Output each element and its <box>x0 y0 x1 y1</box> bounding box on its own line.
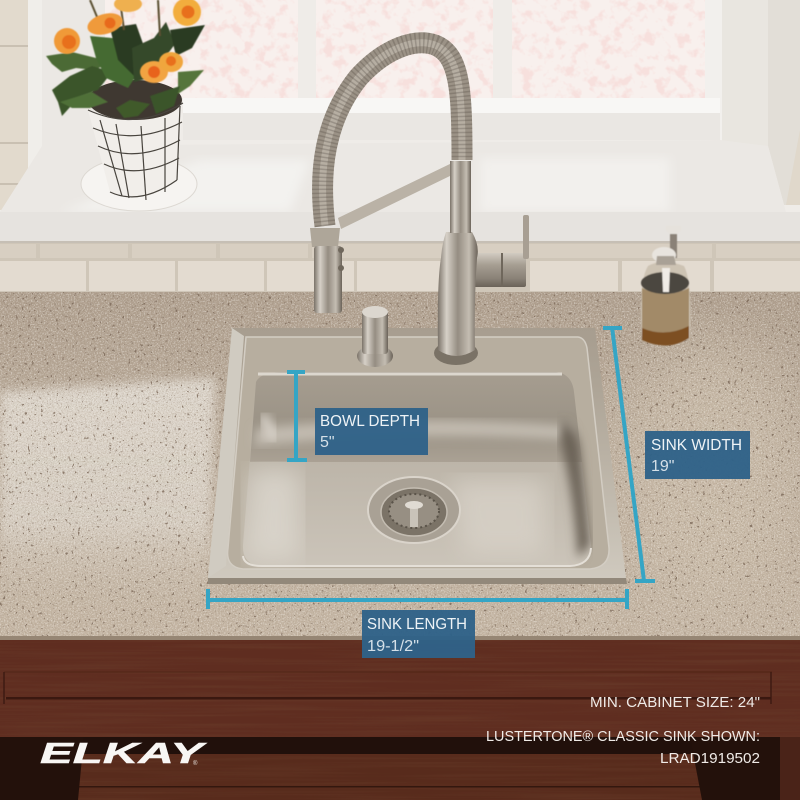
left tile wall <box>0 0 42 210</box>
faucet <box>310 43 529 365</box>
foliage <box>46 0 205 118</box>
flowers <box>54 0 201 83</box>
soap dispenser <box>357 306 393 367</box>
callout: bowl depth: 5" <box>320 434 335 451</box>
faucet base ring <box>434 341 478 365</box>
window pane: left <box>105 0 298 98</box>
sink deck rim <box>228 337 609 569</box>
soap bottle <box>641 226 690 346</box>
potted plant <box>46 0 205 211</box>
back wall <box>250 372 582 462</box>
logo: Elkay <box>40 738 207 770</box>
dimension: bowl depth <box>287 371 307 461</box>
callout: sink length <box>362 610 475 658</box>
pull-down coil hose <box>323 43 462 226</box>
callout: sink length: 19-1/2" <box>367 638 419 655</box>
logo: Elkay: ® <box>193 760 198 767</box>
callout: sink length: SINK LENGTH <box>367 616 467 633</box>
window pane: right <box>512 0 705 98</box>
callout: bowl depth: BOWL DEPTH <box>320 413 420 430</box>
pot <box>88 103 183 197</box>
text: model shown <box>486 728 760 767</box>
logo: Elkay: ELKAY <box>40 738 207 770</box>
spray head <box>310 228 344 313</box>
text: model shown: LRAD1919502 <box>660 750 760 767</box>
wire grid <box>88 103 183 200</box>
sink deck <box>208 328 626 578</box>
window sill <box>0 140 800 243</box>
granite countertop <box>0 292 800 640</box>
dimension: sink width <box>603 327 655 581</box>
faucet handle <box>466 215 529 287</box>
right window trim <box>700 0 800 205</box>
callout: sink width: 19" <box>651 458 674 475</box>
faucet body <box>438 232 478 356</box>
callout: sink width: SINK WIDTH <box>651 437 742 454</box>
faucet neck <box>450 161 471 233</box>
sink <box>208 328 627 584</box>
tile backsplash <box>0 243 800 293</box>
drain <box>368 477 460 543</box>
wood cabinet <box>0 640 800 738</box>
support arm <box>338 163 452 229</box>
text: model shown: LUSTERTONE® CLASSIC SINK SHOWN: <box>486 728 760 745</box>
callout: bowl depth <box>315 408 428 455</box>
dimension: sink length <box>208 589 628 609</box>
window pane: middle <box>316 0 493 98</box>
toe kick and floor <box>0 737 800 800</box>
window backdrop <box>0 0 800 245</box>
callout: sink width <box>645 431 750 479</box>
right side wall <box>560 420 590 558</box>
saucer <box>81 157 197 211</box>
text: minimum cabinet size: MIN. CABINET SIZE: 24" <box>590 694 760 711</box>
sink bowl <box>243 372 591 566</box>
